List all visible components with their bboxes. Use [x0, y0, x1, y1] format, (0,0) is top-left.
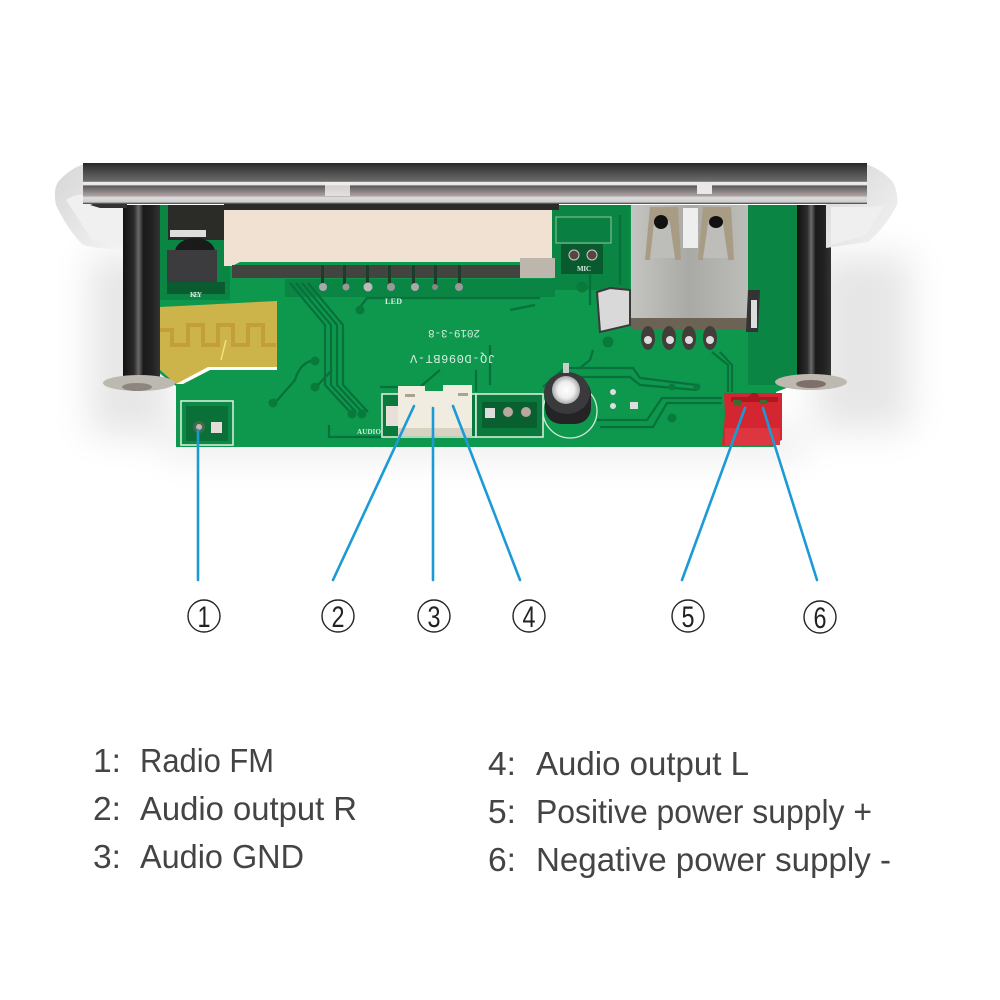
antenna: [160, 301, 277, 384]
legend 6: Negative power supply -: [536, 841, 891, 878]
silkscreen labels: [190, 265, 591, 436]
legend 4: Audio output L: [536, 745, 749, 782]
callout 2: 2: [332, 601, 344, 634]
leader 4: [453, 406, 520, 580]
fm pad: [181, 401, 233, 445]
legend 2: Audio output R: [140, 790, 357, 827]
callout 3: 3: [428, 601, 440, 634]
usb connector: [597, 205, 760, 350]
callout 2: [322, 600, 354, 634]
speaker header: [476, 394, 543, 437]
leader 3: [432, 408, 434, 580]
leader 6: [763, 408, 817, 580]
mic pads: [556, 217, 611, 274]
display module: [224, 203, 559, 278]
left stand: [103, 205, 175, 391]
board darker areas: [160, 205, 797, 385]
legend 5: Positive power supply +: [536, 793, 872, 830]
leader 5: [682, 408, 745, 580]
leader 1: [197, 430, 199, 580]
legend 3: Audio GND: [140, 838, 304, 875]
key switch: [167, 205, 225, 294]
numbered callouts: [188, 600, 836, 635]
legend 6: 6:: [488, 841, 516, 878]
board traces: [274, 215, 732, 437]
callout 5: 5: [682, 601, 694, 634]
leader 2: [333, 406, 414, 580]
callout 3: [418, 600, 450, 634]
soft shadow: [90, 255, 910, 454]
right stand: [775, 205, 847, 390]
legend 1: 1:: [93, 742, 121, 779]
callout 1: 1: [198, 601, 210, 634]
legend 2: 2:: [93, 790, 121, 827]
device photo illustration: [55, 163, 898, 447]
callout 6: [804, 601, 836, 635]
capacitor: [543, 363, 597, 438]
callout 1: [188, 600, 220, 634]
legend 5: 5:: [488, 793, 516, 830]
silkscreen labels: AUDIO: [357, 428, 382, 436]
callout 6: 6: [814, 602, 826, 635]
callout 4: 4: [522, 601, 536, 634]
silkscreen labels: 2019-3-8: [428, 326, 480, 338]
acrylic lens: [55, 163, 898, 250]
leader lines: [198, 406, 817, 580]
silkscreen labels: KEY: [190, 291, 202, 299]
board vias: [269, 282, 700, 422]
silkscreen labels: LED: [385, 297, 402, 306]
legend 1: Radio FM: [140, 742, 274, 779]
legend right column: [488, 745, 891, 878]
legend 4: 4:: [488, 745, 516, 782]
legend left column: [93, 742, 357, 875]
circuit board: [158, 205, 797, 447]
legend 3: 3:: [93, 838, 121, 875]
power connector: [722, 393, 782, 445]
callout 5: [672, 600, 704, 634]
display pins: [319, 265, 463, 292]
silkscreen labels: JQ-D096BT-V: [409, 351, 495, 365]
audio header: [382, 385, 476, 437]
silkscreen labels: MIC: [577, 265, 591, 273]
callout 4: [513, 600, 545, 634]
